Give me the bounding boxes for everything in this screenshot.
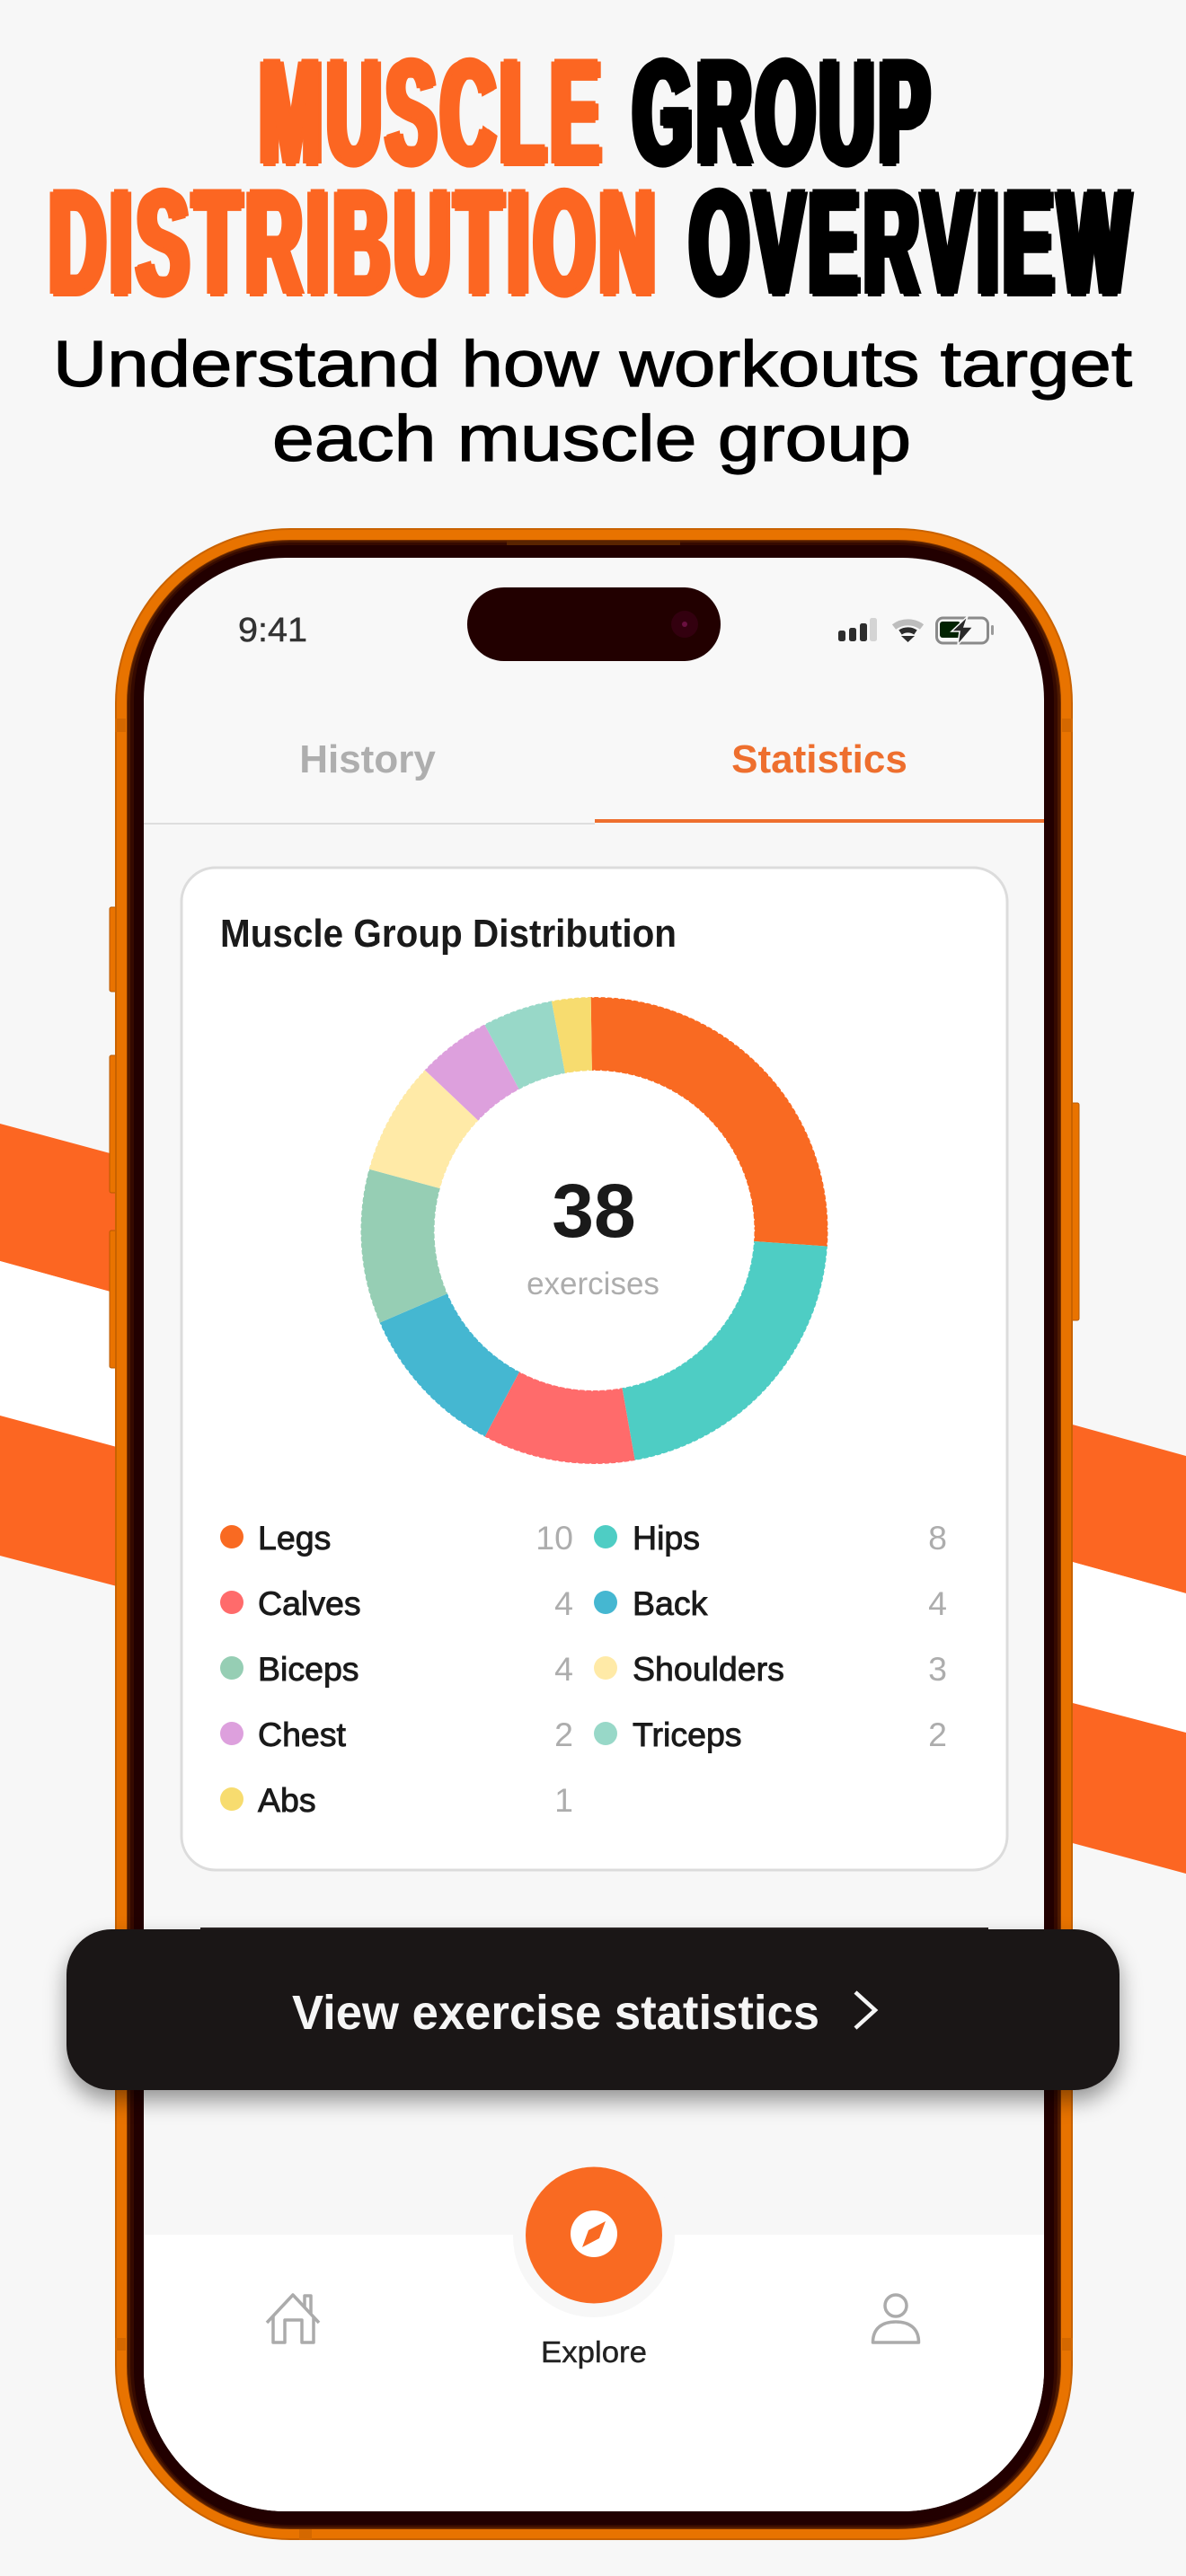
legend: Calves: 4 (554, 1584, 573, 1622)
legend: Chest (220, 1721, 571, 1747)
title word: OVERVIEW: OVERVIEW (690, 160, 1135, 325)
legend: Back: 4 (928, 1584, 947, 1622)
icon: compass (571, 2210, 617, 2257)
tab: Statistics: Statistics (731, 737, 907, 781)
subtitle (53, 329, 1132, 475)
legend: Calves: Calves (258, 1584, 361, 1622)
legend: Triceps: Triceps (633, 1716, 742, 1753)
phone frame (115, 528, 1073, 2540)
legend (220, 1519, 947, 1819)
tabs (144, 737, 1044, 825)
tab: History: History (299, 737, 436, 781)
legend: Legs: Legs (258, 1519, 331, 1557)
icon: charging battery (936, 616, 994, 645)
legend: Triceps (594, 1721, 945, 1753)
explore button (526, 2166, 662, 2303)
legend: Chest: 2 (554, 1716, 573, 1753)
legend: Chest: Chest (258, 1716, 347, 1753)
panel: muscle group distribution card (181, 868, 1007, 1870)
dynamic island (467, 587, 721, 661)
legend: Legs: 10 (535, 1519, 573, 1557)
title (49, 30, 1135, 325)
subtitle line 1: Understand how workouts target (53, 329, 1132, 401)
donut center caption: exercises (527, 1266, 659, 1301)
title word: GROUP: GROUP (633, 30, 934, 195)
phone mockup (110, 528, 1079, 2540)
status time: 9:41 (238, 612, 307, 649)
icon: cellular signal (838, 618, 877, 641)
bottom navigation (144, 2156, 1044, 2513)
legend: Biceps: Biceps (258, 1650, 359, 1688)
icon: chevron (855, 1992, 875, 2028)
button label: View exercise statistics (292, 1986, 819, 2040)
icon: profile (873, 2295, 918, 2342)
legend: Back: Back (633, 1584, 708, 1622)
legend: Abs: Abs (258, 1781, 316, 1819)
donut chart (359, 996, 828, 1465)
label: Explore: Explore (541, 2335, 647, 2369)
legend: Legs (220, 1525, 571, 1557)
legend: Hips: Hips (633, 1519, 700, 1557)
phone screen (144, 558, 1044, 2513)
legend: Shoulders: Shoulders (633, 1650, 784, 1688)
call to action button (66, 1928, 1120, 2090)
legend: Hips (594, 1525, 945, 1557)
decorative stripes: left (0, 1124, 117, 1586)
legend: Triceps: 2 (928, 1716, 947, 1753)
icon: home (267, 2295, 319, 2342)
donut center total (528, 1184, 659, 1295)
legend: Back (594, 1590, 946, 1616)
legend: Shoulders: 3 (928, 1650, 947, 1688)
legend: Abs: 1 (554, 1781, 573, 1819)
legend: Biceps: 4 (554, 1650, 573, 1688)
donut center total: 38 (552, 1169, 636, 1253)
card heading: Muscle Group Distribution (220, 912, 677, 956)
title word: DISTRIBUTION: DISTRIBUTION (49, 160, 660, 325)
legend: Hips: 8 (928, 1519, 947, 1557)
phone side buttons (110, 907, 1079, 1368)
status bar (238, 587, 994, 661)
subtitle line 2: each muscle group (272, 403, 911, 475)
legend: Calves (220, 1590, 572, 1616)
decorative stripes: right (1069, 1424, 1186, 1874)
legend: Biceps (220, 1656, 572, 1688)
legend: Shoulders (594, 1656, 945, 1681)
title word: MUSCLE: MUSCLE (260, 30, 606, 195)
icon: wifi (894, 622, 922, 642)
legend: Abs (220, 1787, 571, 1813)
